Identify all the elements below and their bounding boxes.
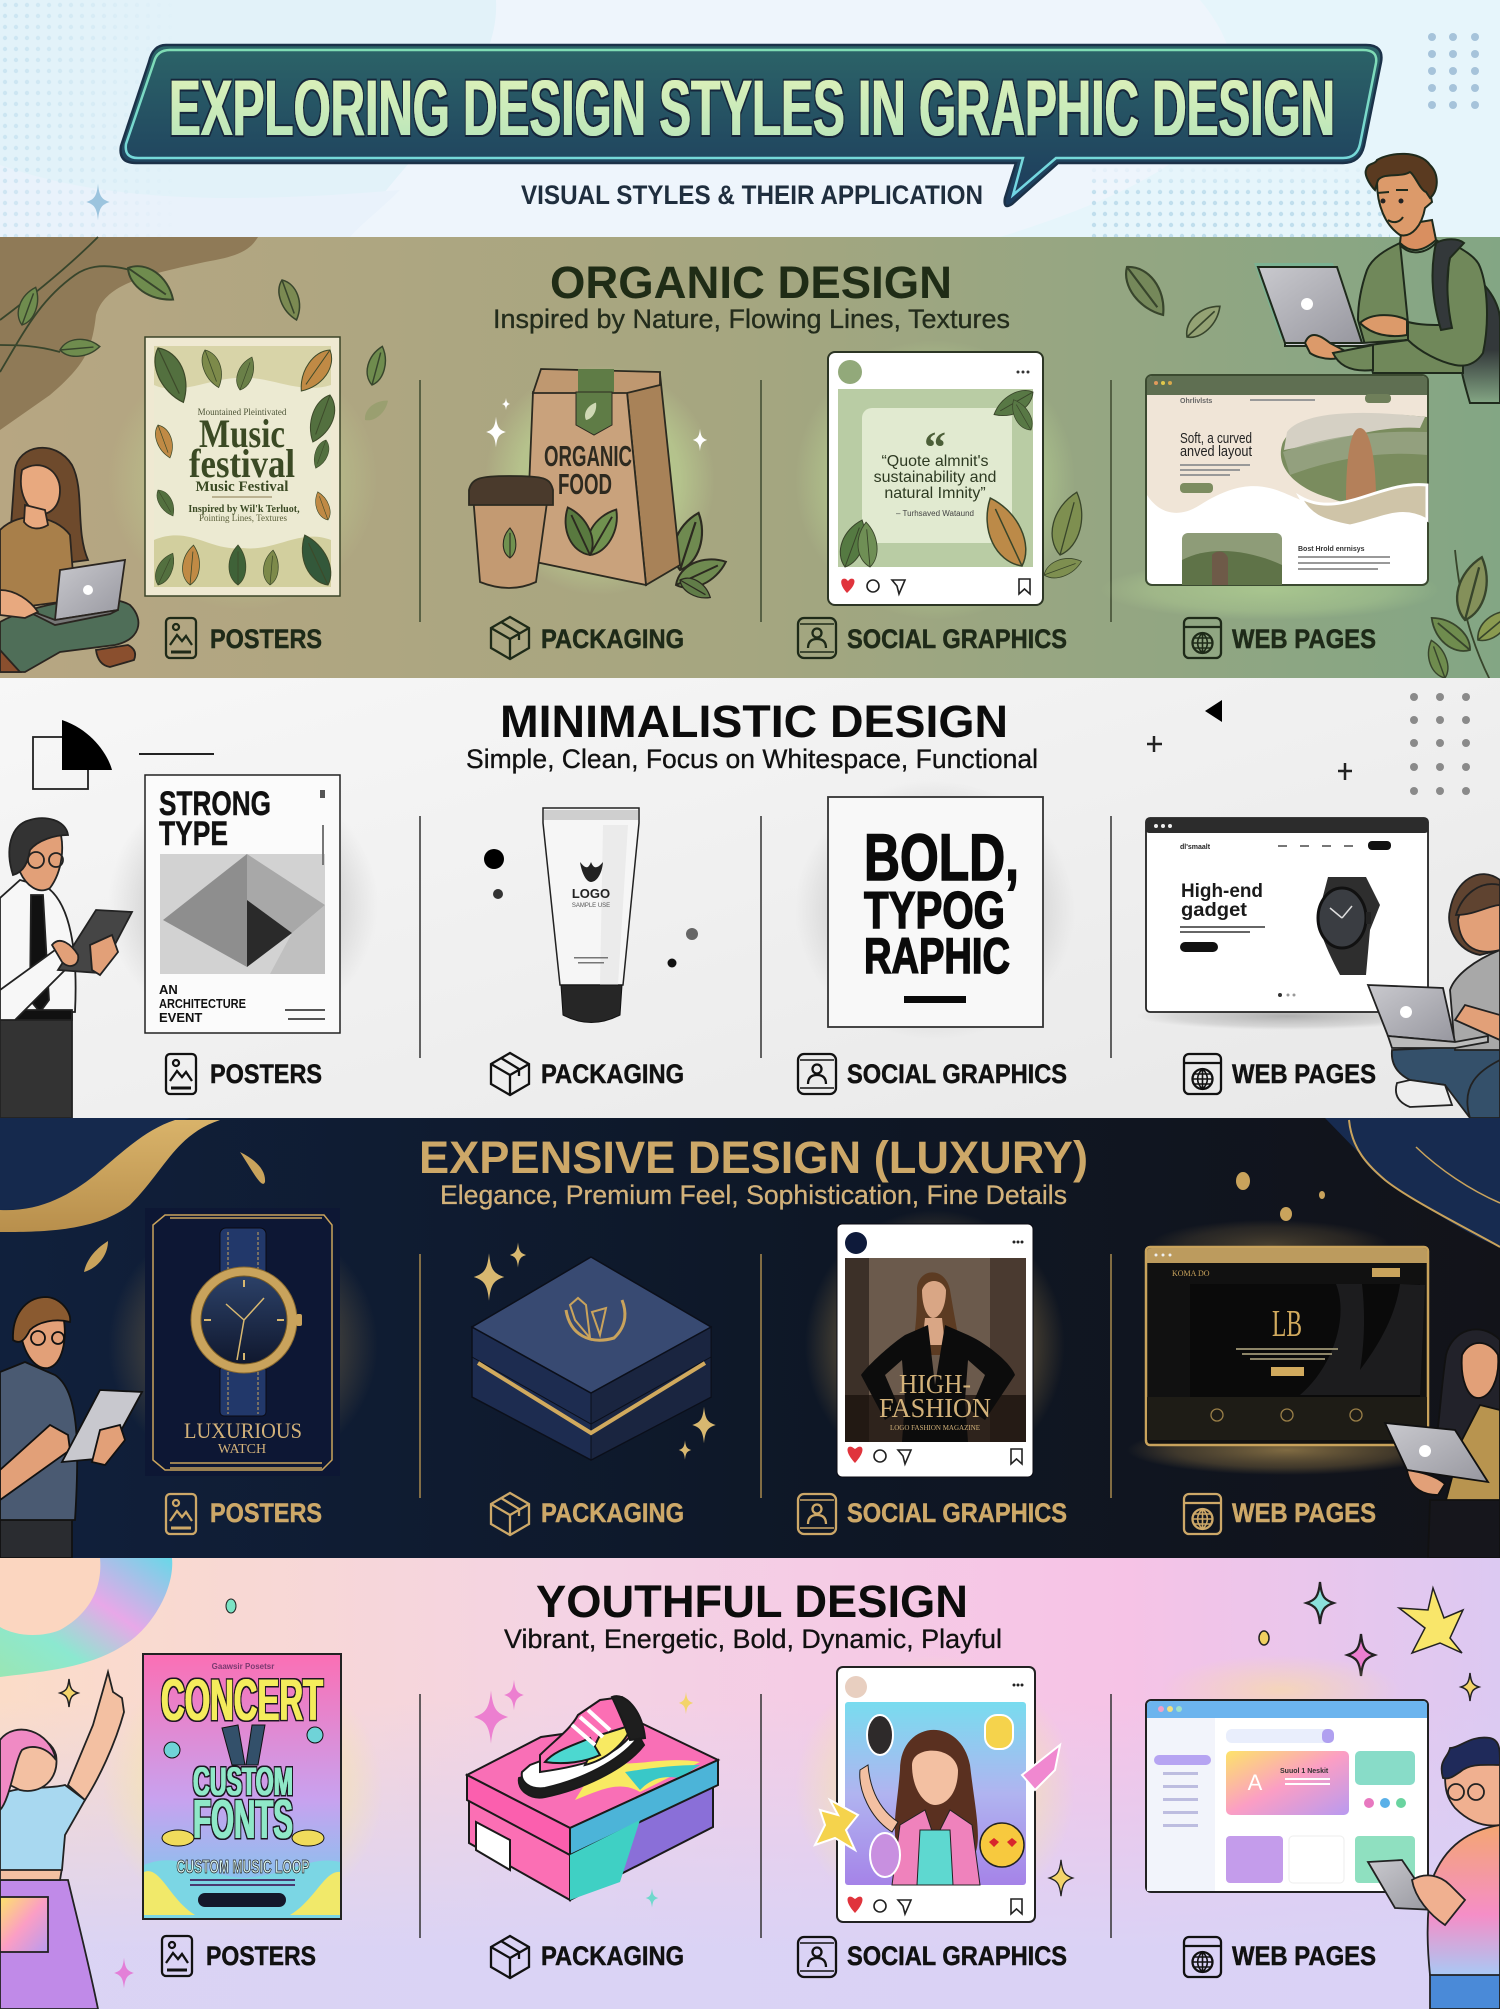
poster: concert: FONTS bbox=[193, 1788, 293, 1850]
label: packaging bbox=[491, 1053, 684, 1095]
packaging: tube: LOGO bbox=[572, 886, 610, 901]
label: social graphics bbox=[798, 1494, 1067, 1534]
label: posters bbox=[166, 1494, 322, 1534]
web page mockup: gadget: High-end bbox=[1181, 881, 1263, 902]
decorative gold swoosh bbox=[0, 1118, 1500, 1272]
web page mockup: dashboard: Suuol 1 Neskit bbox=[1280, 1768, 1329, 1775]
poster: concert: Gaawsir Posetsr bbox=[212, 1662, 274, 1671]
social card: quote: sustainability and bbox=[874, 469, 996, 486]
label: packaging bbox=[491, 617, 684, 659]
web page mockup: organic: anved layout bbox=[1180, 443, 1253, 460]
packaging: paper bag and cup: ORGANIC bbox=[544, 441, 632, 473]
social card: high-fashion: HIGH- bbox=[899, 1369, 971, 1399]
tagline: Vibrant, Energetic, Bold, Dynamic, Playful bbox=[504, 1624, 1002, 1654]
heading: MINIMALISTIC DESIGN bbox=[500, 696, 1008, 747]
social card: bold typographic: RAPHIC bbox=[864, 928, 1010, 984]
character: man with tablet bbox=[0, 1297, 142, 1558]
social card: bold typographic: TYPOG bbox=[864, 882, 1005, 940]
label: posters bbox=[162, 1936, 316, 1976]
web page mockup: organic: Soft, a curved bbox=[1180, 430, 1252, 447]
web page mockup: luxury: LB bbox=[1272, 1303, 1302, 1345]
labels bbox=[162, 1936, 1376, 1978]
label: posters: POSTERS bbox=[206, 1941, 316, 1971]
packaging: tube: SAMPLE USE bbox=[572, 903, 610, 909]
packaging: tube bbox=[484, 808, 698, 1022]
tagline: Elegance, Premium Feel, Sophistication, Fine Details bbox=[440, 1180, 1067, 1210]
heading: ORGANIC DESIGN bbox=[550, 257, 952, 308]
poster: strong type: STRONG bbox=[159, 785, 271, 823]
social card: bold typographic bbox=[828, 797, 1043, 1027]
label: posters bbox=[166, 1054, 322, 1094]
label: social graphics: SOCIAL GRAPHICS bbox=[847, 1941, 1067, 1971]
dividers bbox=[420, 816, 1111, 1058]
label: posters: POSTERS bbox=[210, 1498, 322, 1528]
social card: quote: “Quote almnit's bbox=[881, 453, 989, 470]
poster: luxurious watch bbox=[145, 1208, 340, 1476]
poster: strong type: EVENT bbox=[159, 1010, 202, 1025]
social card: bold typographic: BOLD, bbox=[864, 820, 1019, 894]
label: web pages: WEB PAGES bbox=[1232, 1941, 1376, 1971]
label: posters: POSTERS bbox=[210, 1059, 322, 1089]
social card: quote: natural Imnity” bbox=[884, 485, 986, 502]
label: web pages: WEB PAGES bbox=[1232, 624, 1376, 654]
label: packaging bbox=[491, 1493, 684, 1535]
character: woman with laptop, seated bbox=[1368, 874, 1500, 1118]
shapes bbox=[33, 700, 1352, 789]
glows bbox=[103, 1655, 1400, 1925]
packaging: paper bag and cup bbox=[469, 369, 730, 603]
tagline: Inspired by Nature, Flowing Lines, Textures bbox=[493, 304, 1010, 334]
label: packaging: PACKAGING bbox=[541, 1059, 684, 1089]
web page mockup: dashboard bbox=[1146, 1700, 1428, 1892]
poster: luxurious watch: WATCH bbox=[218, 1442, 266, 1457]
poster: strong type: AN bbox=[159, 982, 178, 997]
label: web pages bbox=[1184, 1494, 1376, 1534]
stars bbox=[60, 1582, 1479, 1988]
poster: music festival: Mountained Pleintivated bbox=[198, 407, 287, 417]
labels bbox=[166, 1053, 1376, 1095]
decorative vine and leaves bbox=[0, 237, 1500, 681]
poster: music festival: Pointing Lines, Textures bbox=[199, 513, 287, 523]
label: packaging: PACKAGING bbox=[541, 1941, 684, 1971]
dividers bbox=[420, 1254, 1111, 1498]
poster: music festival: Music bbox=[199, 411, 285, 456]
panel: youthful design bbox=[0, 1558, 1500, 2009]
packaging: paper bag and cup: FOOD bbox=[558, 469, 612, 501]
social card: high-fashion bbox=[837, 1224, 1033, 1477]
label: social graphics: SOCIAL GRAPHICS bbox=[847, 1498, 1067, 1528]
label: social graphics bbox=[798, 1937, 1067, 1977]
poster: concert bbox=[143, 1654, 341, 1919]
subtitle: VISUAL STYLES & THEIR APPLICATION bbox=[521, 180, 983, 210]
web page mockup: organic: Bost Hrold enrnisys bbox=[1298, 546, 1365, 553]
web page mockup: luxury bbox=[1146, 1247, 1428, 1445]
poster: music festival: festival bbox=[189, 441, 295, 486]
social card: quote: “ bbox=[924, 423, 946, 472]
character: woman with laptop bbox=[1385, 1329, 1500, 1560]
dividers bbox=[420, 1694, 1111, 1938]
social card: high-fashion: FASHION bbox=[879, 1393, 991, 1423]
label: web pages: WEB PAGES bbox=[1232, 1059, 1376, 1089]
web page mockup: organic bbox=[1146, 375, 1428, 585]
label: packaging: PACKAGING bbox=[541, 1498, 684, 1528]
web page mockup: luxury: KOMA DO bbox=[1172, 1269, 1210, 1278]
label: social graphics bbox=[798, 618, 1067, 658]
item glows bbox=[108, 340, 1440, 620]
character: man with laptop and backpack bbox=[1254, 154, 1500, 403]
label: social graphics: SOCIAL GRAPHICS bbox=[847, 1059, 1067, 1089]
web page mockup: gadget: gadget bbox=[1181, 900, 1248, 921]
social card: quote: – Turhsaved Wataund bbox=[896, 509, 974, 518]
character: woman seated with laptop bbox=[0, 448, 138, 672]
poster: concert: CONCERT bbox=[161, 1668, 323, 1733]
poster: music festival bbox=[145, 337, 341, 596]
character: girl pointing up bbox=[0, 1672, 124, 2009]
web page mockup: dashboard: A bbox=[1248, 1770, 1263, 1795]
label: web pages bbox=[1184, 1937, 1376, 1977]
packaging: shoe box bbox=[467, 1680, 718, 1908]
heading: YOUTHFUL DESIGN bbox=[536, 1576, 968, 1627]
decorative swirl bbox=[0, 1558, 236, 1677]
label: packaging bbox=[491, 1936, 684, 1978]
labels bbox=[166, 1493, 1376, 1535]
character: man with tablet bbox=[0, 818, 132, 1118]
poster: strong type bbox=[145, 775, 340, 1033]
title banner bbox=[121, 45, 1381, 206]
heading: EXPENSIVE DESIGN (LUXURY) bbox=[419, 1132, 1088, 1183]
web page mockup: gadget: dl'smaalt bbox=[1180, 844, 1211, 851]
social card: playful portrait bbox=[815, 1667, 1073, 1922]
character: man with tablet bbox=[1368, 1738, 1500, 2009]
panel: minimalistic design bbox=[0, 678, 1500, 1118]
label: web pages bbox=[1184, 618, 1376, 658]
poster: music festival: Inspired by Wil'k Terluot, bbox=[188, 504, 300, 515]
panel: expensive design (luxury) bbox=[0, 1118, 1500, 1560]
packaging: luxury box bbox=[472, 1242, 716, 1460]
label: posters: POSTERS bbox=[210, 624, 322, 654]
label: posters bbox=[166, 618, 322, 658]
poster: strong type: ARCHITECTURE bbox=[159, 996, 246, 1011]
social card: quote bbox=[828, 352, 1089, 605]
dots bbox=[1410, 693, 1470, 795]
poster: concert: CUSTOM MUSIC LOOP bbox=[176, 1857, 310, 1877]
column dividers bbox=[420, 380, 1111, 622]
poster: music festival: Music Festival bbox=[196, 479, 288, 495]
web page mockup: gadget bbox=[1146, 818, 1428, 1012]
social card: high-fashion: LOGO FASHION MAGAZINE bbox=[890, 1424, 980, 1432]
poster: concert: CUSTOM bbox=[193, 1760, 293, 1804]
label: packaging: PACKAGING bbox=[541, 624, 684, 654]
labels bbox=[166, 617, 1376, 659]
label: web pages bbox=[1184, 1054, 1376, 1094]
decorative dot grid bbox=[1428, 33, 1479, 109]
shadows bbox=[108, 775, 1437, 1040]
header background bbox=[0, 0, 1500, 238]
glows bbox=[108, 1210, 1447, 1480]
poster: luxurious watch: LUXURIOUS bbox=[184, 1418, 302, 1443]
icon: sparkle bbox=[86, 184, 110, 220]
panel: organic design bbox=[0, 237, 1500, 681]
label: social graphics: SOCIAL GRAPHICS bbox=[847, 624, 1067, 654]
tagline: Simple, Clean, Focus on Whitespace, Functional bbox=[466, 744, 1038, 774]
web page mockup: organic: Ohrlivlsts bbox=[1180, 398, 1212, 405]
label: social graphics bbox=[798, 1054, 1067, 1094]
label: web pages: WEB PAGES bbox=[1232, 1498, 1376, 1528]
poster: strong type: TYPE bbox=[159, 815, 228, 853]
